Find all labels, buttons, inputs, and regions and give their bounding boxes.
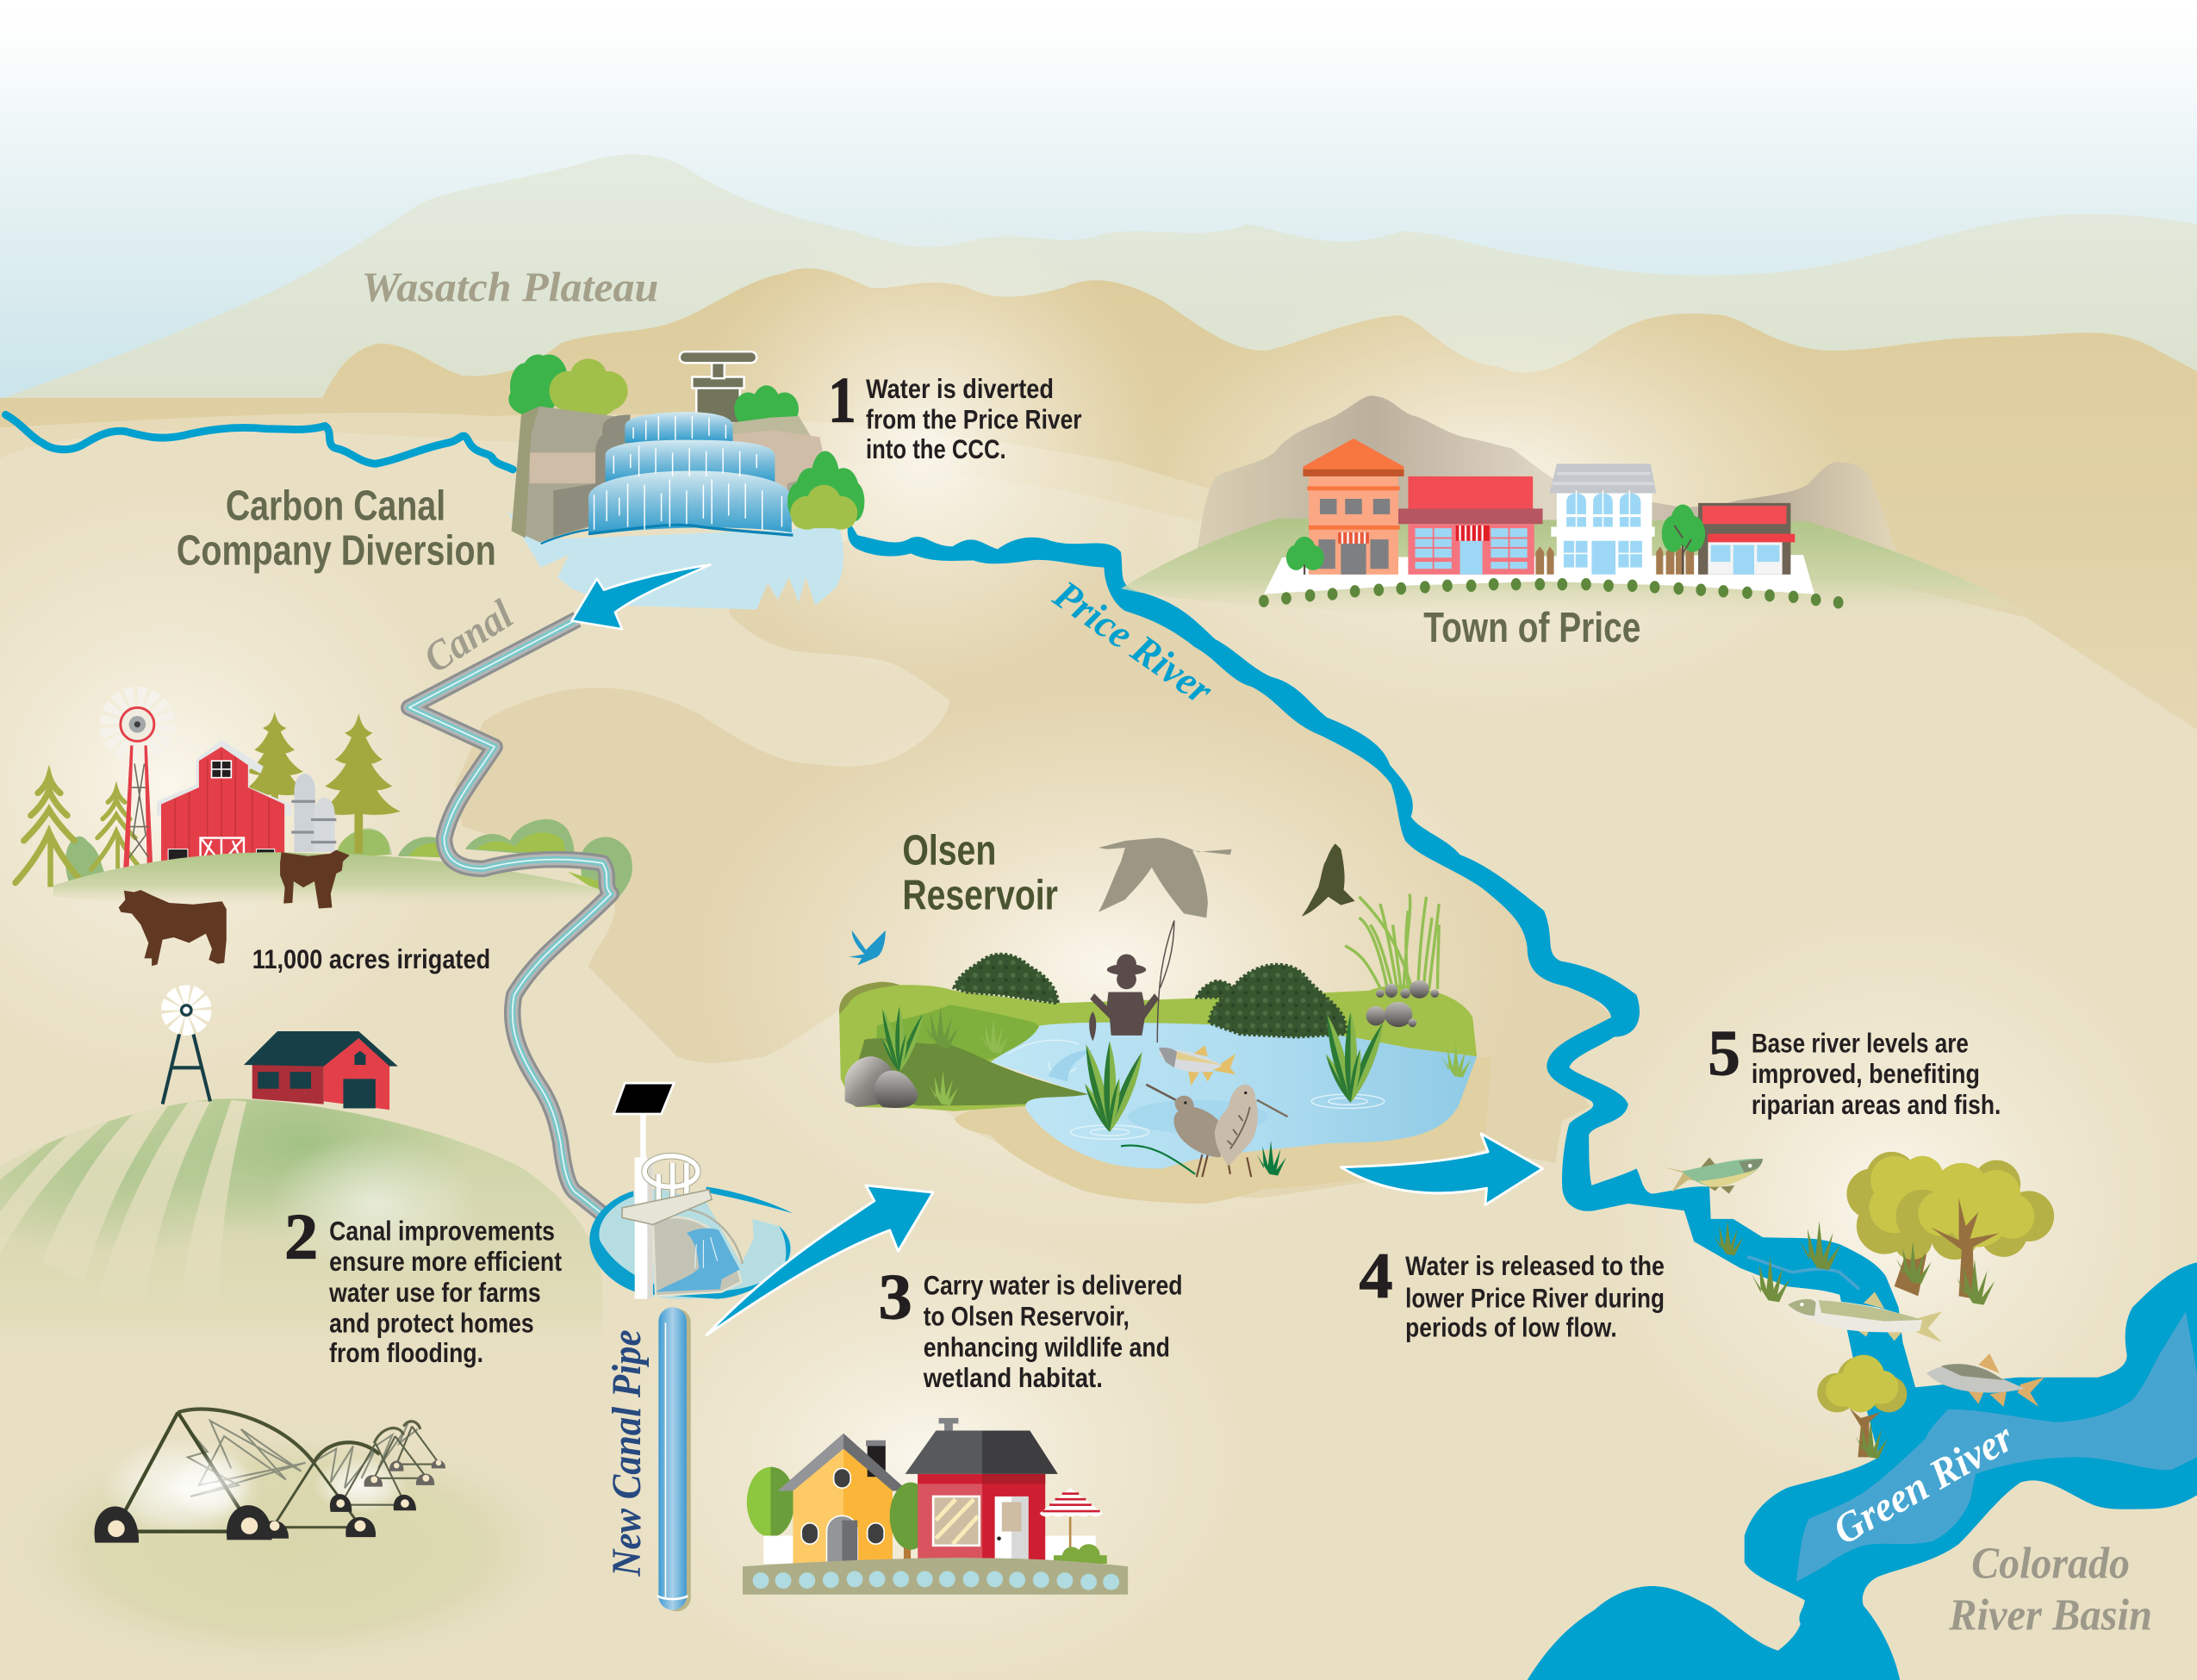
step 1: Water is diverted — [866, 373, 1054, 404]
legs — [116, 1412, 249, 1532]
left fir trees — [16, 776, 141, 887]
step 3: Carry water is delivered — [924, 1270, 1183, 1301]
water ripples — [1009, 1040, 1385, 1139]
step 4: Water is released to the — [1405, 1250, 1665, 1281]
Carbon Canal label: Carbon Canal — [226, 482, 445, 529]
center pivot irrigation — [0, 1409, 588, 1677]
right lower trees — [787, 451, 864, 521]
waterfall streaks — [594, 416, 781, 530]
rock wall — [519, 407, 631, 542]
paved base with stones — [743, 1558, 1128, 1595]
boulders left — [845, 1056, 918, 1108]
reed grass top right — [1345, 894, 1439, 989]
sand — [954, 1056, 1491, 1204]
shorebirds — [1146, 1085, 1288, 1177]
front tree — [1895, 1160, 2054, 1299]
fish: middle — [1788, 1291, 1942, 1342]
trusses — [186, 1421, 418, 1496]
railing — [644, 1156, 698, 1208]
spillway water — [656, 1229, 740, 1291]
boulders right — [1366, 980, 1439, 1027]
windmill with red tower — [109, 696, 165, 870]
pine trees — [239, 712, 401, 853]
Olsen Reservoir label: Olsen — [902, 827, 996, 874]
town hill — [1121, 519, 2041, 620]
step 1: into the CCC. — [866, 433, 1006, 464]
step 4: 4 — [1359, 1241, 1393, 1312]
valve — [680, 352, 756, 423]
soft glow: riparian trees — [1597, 911, 2186, 1499]
step 2 — [284, 1201, 563, 1368]
arches — [178, 1409, 380, 1463]
step 5: improved, benefiting — [1752, 1058, 1980, 1089]
step 3 arrow — [706, 1185, 933, 1335]
step 2: Canal improvements — [329, 1215, 555, 1246]
deck — [622, 1190, 712, 1224]
hawk silhouette — [1302, 843, 1355, 917]
water reed right — [1322, 1011, 1389, 1105]
plain midtone band — [0, 413, 2197, 1121]
step 3: enhancing wildlife and — [924, 1331, 1170, 1362]
Green River lighter channel — [1796, 1311, 2197, 1582]
Canal label: Canal — [415, 591, 521, 682]
river light channel — [1747, 1257, 1859, 1289]
step 3: wetland habitat. — [923, 1362, 1103, 1393]
patio umbrella — [1040, 1488, 1103, 1559]
right tree — [890, 1483, 931, 1564]
orange building — [1303, 439, 1404, 575]
town trees — [1286, 504, 1705, 575]
dark shrub right — [1209, 965, 1346, 1037]
step 4: lower Price River during — [1405, 1282, 1665, 1313]
waterfall tiers — [588, 412, 792, 535]
farm hill — [53, 852, 619, 907]
Wasatch Plateau label: Wasatch Plateau — [362, 264, 658, 311]
step 1: 1 — [828, 365, 856, 437]
shrub — [1054, 1544, 1107, 1566]
Olsen Reservoir label: Reservoir — [902, 873, 1058, 919]
step 3 — [879, 1261, 1183, 1393]
red house — [906, 1418, 1058, 1561]
step 2: water use for farms — [328, 1277, 541, 1308]
step 1: from the Price River — [866, 404, 1081, 435]
water — [991, 1023, 1477, 1168]
canal outlet gate — [589, 1083, 793, 1299]
trees left — [508, 354, 568, 416]
wheels — [95, 1494, 416, 1543]
brown building — [1698, 503, 1795, 575]
homes — [743, 1418, 1128, 1595]
town of Price — [1121, 395, 2041, 620]
riparian trees — [1817, 1152, 2054, 1457]
lower field hill — [0, 1098, 602, 1320]
trees and rocks right — [734, 385, 799, 426]
fish: upper — [1663, 1157, 1763, 1194]
step 3: to Olsen Reservoir, — [924, 1301, 1130, 1332]
step 4: periods of low flow. — [1405, 1312, 1617, 1343]
hedge dots — [1259, 578, 1844, 608]
small windmill — [163, 994, 210, 1104]
step 1 — [828, 365, 1081, 464]
step 4 arrow — [1341, 1134, 1543, 1205]
Carbon Canal label: Company Diversion — [177, 527, 496, 574]
dark grass by birds — [1121, 1141, 1286, 1176]
step 2: ensure more efficient — [329, 1246, 563, 1277]
outlet pool — [590, 1188, 791, 1299]
water reed left — [879, 1006, 927, 1073]
far mountains: Wasatch Plateau — [0, 154, 2197, 588]
riparian grasses — [1714, 1221, 1995, 1459]
step 2: and protect homes — [329, 1308, 534, 1339]
pivot field — [0, 1419, 588, 1677]
cow — [119, 890, 227, 966]
step 5: Base river levels are — [1752, 1027, 1969, 1058]
Carbon Canal label — [177, 482, 496, 574]
fish: lower — [1926, 1353, 2045, 1407]
step 3: 3 — [879, 1261, 912, 1333]
yellow house — [778, 1434, 908, 1564]
soft glow: reservoir — [687, 687, 1528, 1247]
diversion arrow — [572, 564, 711, 629]
small shrub — [1197, 980, 1239, 998]
fisherman — [1089, 921, 1174, 1042]
red building — [1398, 476, 1543, 575]
pool rim — [589, 1187, 793, 1299]
step 5 — [1708, 1017, 2001, 1120]
diversion structure — [507, 352, 864, 629]
left tree — [747, 1467, 794, 1544]
crane silhouette — [1098, 838, 1231, 918]
mountains behind town — [1195, 395, 1900, 563]
new canal pipe — [657, 1307, 691, 1611]
barn — [157, 740, 291, 863]
upper Price River — [6, 414, 513, 470]
farm hill with bushes — [65, 819, 632, 897]
small tree — [1817, 1355, 1907, 1457]
Olsen Reservoir scene — [839, 894, 1491, 1204]
step 5: riparian areas and fish. — [1752, 1089, 2001, 1120]
diversion pool — [507, 512, 843, 609]
step 2: 2 — [284, 1201, 318, 1272]
step 2: from flooding. — [329, 1337, 483, 1368]
Colorado River Basin label: Colorado — [1971, 1539, 2130, 1588]
dark shrub left — [954, 955, 1058, 1003]
mid green slope — [875, 1005, 1048, 1065]
olive bank top — [839, 982, 899, 1014]
gate drum — [653, 1217, 741, 1296]
water reed center — [1080, 1041, 1148, 1135]
swallow — [850, 930, 886, 966]
sky — [0, 0, 2197, 420]
canal — [409, 619, 611, 1216]
soft glow: diversion — [687, 210, 1163, 687]
Green River label: Green River — [1826, 1414, 2022, 1553]
white building — [1535, 464, 1694, 575]
support post — [641, 1114, 644, 1157]
white base — [1264, 555, 1814, 594]
Olsen Reservoir label — [902, 827, 1058, 919]
soft glow: town — [1135, 266, 1864, 714]
fish in pond — [1159, 1045, 1235, 1086]
lower Price River — [848, 521, 2197, 1680]
New Canal Pipe label: New Canal Pipe — [605, 1329, 650, 1577]
Price River label: Price River — [1045, 572, 1221, 713]
red farmhouse — [244, 1031, 398, 1110]
Colorado River Basin label — [1948, 1539, 2152, 1640]
cow — [280, 850, 350, 909]
soft glow: homes — [602, 1219, 1247, 1680]
cream plain — [0, 430, 2197, 1680]
tan basin between canal and river — [456, 539, 1611, 1198]
Town of Price label: Town of Price — [1423, 605, 1640, 651]
bright green bank — [839, 985, 1477, 1111]
soft glow: farm — [0, 490, 463, 1079]
step 5: 5 — [1708, 1017, 1740, 1089]
11,000 acres irrigated: 11,000 acres irrigated — [252, 943, 490, 974]
white fence — [763, 1535, 1096, 1564]
grass tufts — [924, 1006, 1472, 1105]
silos — [291, 774, 336, 852]
dark green slope — [850, 1038, 1089, 1105]
solar panel — [613, 1083, 674, 1114]
tan foothills — [0, 268, 2197, 785]
step 4 — [1359, 1241, 1665, 1343]
back tree — [1846, 1152, 1944, 1296]
Colorado River Basin label: River Basin — [1948, 1590, 2152, 1640]
